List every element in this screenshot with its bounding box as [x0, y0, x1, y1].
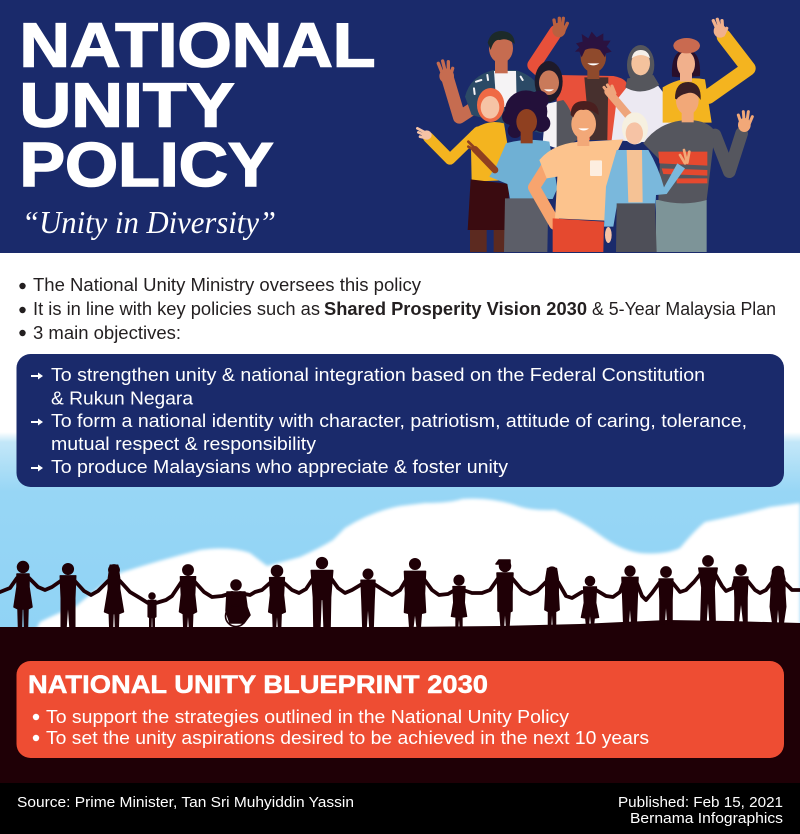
bullet 2: & 5-Year Malaysia Plan [592, 299, 776, 319]
person 3 [104, 565, 124, 627]
objective 2: To form a national identity with character, patriotism, attitude of caring, tolerance, [51, 411, 747, 431]
panel: objectives [16, 354, 784, 487]
child 11 [451, 575, 467, 627]
title: UNITY [20, 72, 234, 140]
objective 1 [31, 365, 705, 408]
blueprint points: To set the unity aspirations desired to be achieved in the next 10 years [46, 728, 649, 748]
person 13 [545, 567, 559, 627]
person 16 [659, 567, 673, 624]
man in grey striped sweater [643, 82, 752, 252]
person 12 with cap [496, 560, 513, 626]
title [20, 12, 376, 200]
title: NATIONAL [20, 12, 376, 80]
man in red plaid shirt [534, 18, 630, 140]
silhouette row: people holding hands [0, 556, 800, 627]
woman with grey jacket [535, 61, 577, 152]
person 8 [311, 558, 333, 627]
ground [0, 620, 800, 790]
person 7 [269, 565, 285, 627]
tagline: “Unity in Diversity” [22, 204, 276, 240]
header band [0, 0, 800, 253]
bullet 2: Shared Prosperity Vision 2030 [324, 299, 587, 319]
bullet 3: 3 main objectives: [33, 323, 181, 343]
woman in hijab [604, 45, 680, 143]
person 1 [14, 562, 32, 627]
person 2 [60, 564, 76, 627]
child 14 [581, 576, 599, 625]
linked arms [0, 572, 800, 603]
man in navy jacket [438, 31, 542, 133]
woman with red hair and yellow sweater [417, 88, 513, 252]
source: Source: Prime Minister, Tan Sri Muhyiddin Yassin [17, 795, 354, 811]
objective 1: & Rukun Negara [51, 388, 194, 408]
wheelchair user 6 [226, 580, 250, 626]
sky with clouds [0, 432, 800, 632]
man in peach t-shirt and red pants [534, 101, 623, 252]
person 19 [770, 566, 786, 624]
bullet 2 [19, 299, 776, 319]
older woman with blue jacket [604, 112, 689, 252]
person 18 [734, 565, 748, 622]
published date: Published: Feb 15, 2021 [618, 795, 783, 811]
person 15 [622, 566, 638, 625]
objective 3: To produce Malaysians who appreciate & foster unity [51, 457, 508, 477]
woman with afro and blue shirt [468, 90, 557, 252]
blueprint points: To support the strategies outlined in the National Unity Policy [46, 707, 569, 727]
child 4 [148, 593, 156, 627]
person 17 [699, 556, 717, 622]
objective 2: mutual respect & responsibility [51, 434, 316, 454]
footer [0, 783, 800, 834]
objective 2 [31, 411, 747, 454]
person 10 [404, 559, 426, 627]
objective 1: To strengthen unity & national integration based on the Federal Constitution [51, 365, 705, 385]
credit: Bernama Infographics [630, 811, 783, 827]
title: POLICY [20, 131, 274, 200]
bullet 1: The National Unity Ministry oversees this policy [33, 275, 421, 295]
blueprint heading: NATIONAL UNITY BLUEPRINT 2030 [28, 671, 488, 699]
panel: blueprint [16, 661, 784, 758]
blueprint points [33, 707, 649, 748]
intro bullet list [19, 275, 776, 343]
person 5 [179, 565, 197, 627]
person 9 [361, 569, 375, 627]
illustration: diverse group of people waving [417, 18, 752, 252]
woman in beanie and yellow sweater [663, 19, 748, 123]
bullet 2: It is in line with key policies such as [33, 299, 320, 319]
